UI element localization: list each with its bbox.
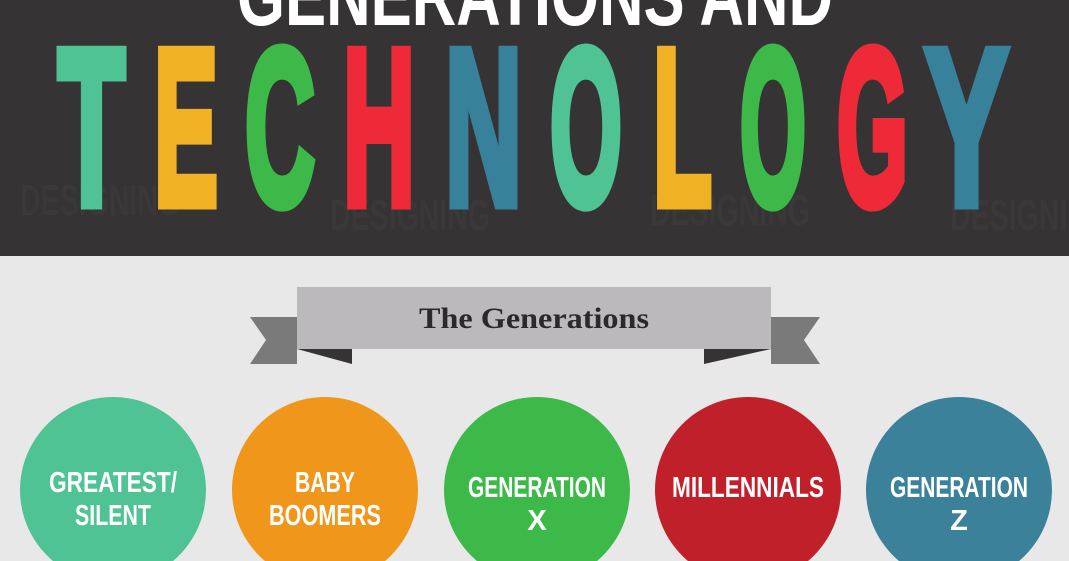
- title: TECHNOLOGY: G: [837, 4, 908, 252]
- watermark: DESIGNING: [330, 191, 490, 240]
- generation circles: [20, 397, 1052, 561]
- circle: baby boomers: BOOMERS: [269, 500, 381, 532]
- ribbon banner: [250, 287, 820, 364]
- circle: baby boomers: BABY: [295, 467, 355, 499]
- title: TECHNOLOGY: N: [445, 4, 522, 252]
- title: TECHNOLOGY: O: [740, 4, 806, 252]
- watermark: DESIGNING: [650, 186, 810, 235]
- title: TECHNOLOGY: O: [550, 4, 622, 252]
- circle: generation z: [866, 397, 1052, 561]
- circle: greatest/silent: GREATEST/: [49, 467, 177, 499]
- watermark: [20, 176, 1069, 240]
- title: TECHNOLOGY: [58, 4, 1008, 252]
- circle: baby boomers: [232, 397, 418, 561]
- title: TECHNOLOGY: L: [653, 4, 712, 252]
- title: TECHNOLOGY: C: [245, 4, 315, 252]
- ribbon banner: The Generations: [419, 302, 649, 335]
- title: TECHNOLOGY: H: [343, 4, 415, 252]
- title: TECHNOLOGY: Y: [925, 4, 1008, 252]
- title: TECHNOLOGY: T: [58, 4, 125, 252]
- circle: generation z: Z: [950, 505, 968, 537]
- circle: greatest/silent: SILENT: [75, 500, 151, 532]
- header background: [0, 0, 1069, 256]
- title: TECHNOLOGY: E: [154, 4, 218, 252]
- circle: millennials: [655, 397, 841, 561]
- circle: greatest/silent: [20, 397, 206, 561]
- circle: millennials: MILLENNIALS: [672, 472, 824, 504]
- circle: generation x: X: [527, 505, 547, 537]
- watermark: DESIGNING: [20, 176, 180, 225]
- circle: generation x: GENERATION: [468, 472, 606, 504]
- circle: generation x: [444, 397, 630, 561]
